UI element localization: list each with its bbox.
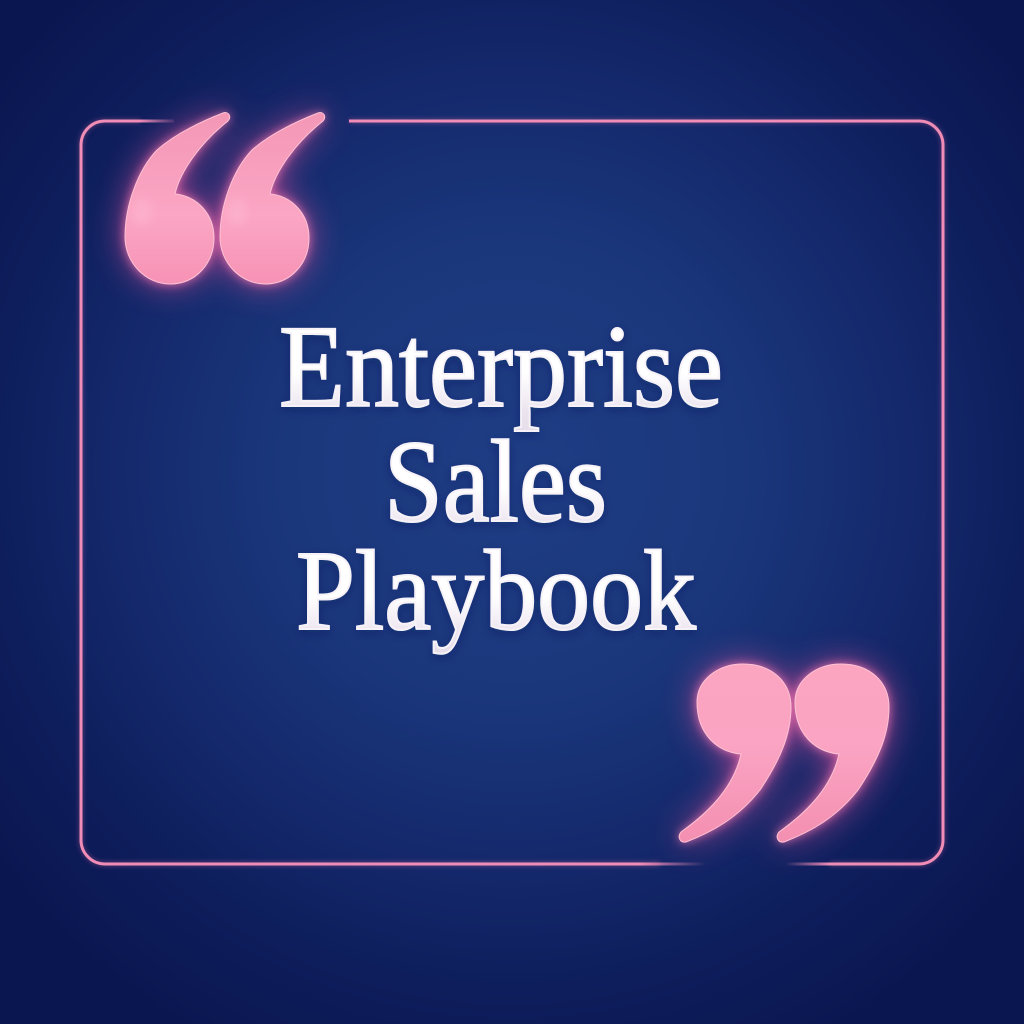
opening quotation mark — [125, 113, 325, 284]
title — [279, 301, 723, 654]
title line 1: Enterprise — [279, 301, 723, 432]
closing quotation mark — [679, 664, 889, 842]
title line 3: Playbook — [296, 527, 696, 654]
neon frame — [81, 121, 943, 864]
title line 2: Sales — [384, 416, 607, 547]
